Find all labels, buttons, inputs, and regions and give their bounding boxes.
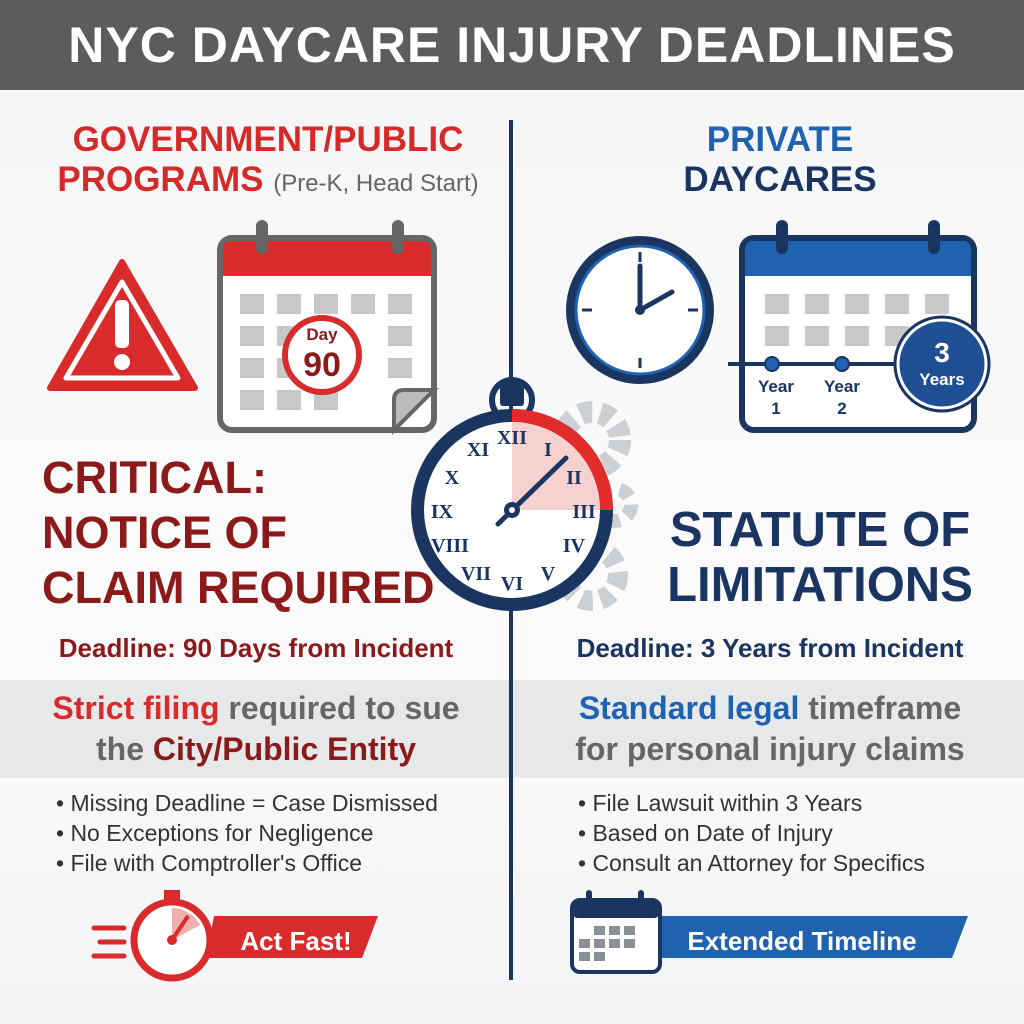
icon: stopwatch: II [566, 467, 582, 489]
gray bands [0, 680, 1024, 778]
icon: calendar day 90 [220, 220, 434, 430]
icon: stopwatch: IX [431, 501, 454, 523]
right bullets: • Based on Date of Injury [578, 820, 833, 846]
left heading [57, 120, 479, 199]
right band text: for personal injury claims [575, 731, 965, 767]
icon: calendar 3 years: Year [758, 377, 794, 396]
right bullets: • Consult an Attorney for Specifics [578, 850, 925, 876]
icon: calendar 3 years: 1 [771, 399, 781, 418]
right main heading: LIMITATIONS [667, 558, 973, 612]
left main heading: CLAIM REQUIRED [42, 562, 434, 613]
left bullets: • File with Comptroller's Office [56, 850, 362, 876]
icon: stopwatch: IV [563, 535, 586, 557]
left bullets [56, 790, 438, 876]
badge: extended timeline [572, 890, 968, 972]
right heading: DAYCARES [683, 160, 877, 199]
right band text [575, 690, 965, 767]
left deadline: Deadline: 90 Days from Incident [59, 633, 453, 663]
icon: stopwatch: VII [461, 563, 491, 585]
right deadline: Deadline: 3 Years from Incident [577, 633, 963, 663]
icon: warning [50, 262, 195, 388]
left main heading: NOTICE OF [42, 507, 287, 558]
left band text: Strict filing required to sue [52, 690, 460, 726]
right main heading: STATUTE OF [670, 503, 970, 557]
icon: stopwatch: XII [497, 427, 527, 449]
icon: stopwatch: I [544, 439, 552, 461]
header bar [0, 0, 1024, 90]
icon: calendar 3 years: Year [824, 377, 860, 396]
right band text: Standard legal timeframe [579, 690, 961, 726]
badge: extended timeline: Extended Timeline [687, 926, 917, 956]
icon: stopwatch: III [572, 501, 596, 523]
icon: calendar 3 years [728, 220, 989, 430]
left bullets: • Missing Deadline = Case Dismissed [56, 790, 438, 816]
badge: act fast: Act Fast! [240, 926, 352, 956]
icon: calendar 3 years: 2 [837, 399, 847, 418]
icon: stopwatch: VIII [431, 535, 469, 557]
icon: stopwatch: VI [501, 573, 523, 595]
title: NYC DAYCARE INJURY DEADLINES [68, 17, 956, 73]
left heading: GOVERNMENT/PUBLIC [73, 120, 463, 159]
icon: calendar day 90: 90 [303, 346, 341, 384]
right heading: PRIVATE [707, 120, 853, 159]
left main heading: CRITICAL: [42, 452, 267, 503]
left bullets: • No Exceptions for Negligence [56, 820, 373, 846]
right bullets: • File Lawsuit within 3 Years [578, 790, 862, 816]
left band text: the City/Public Entity [96, 731, 416, 767]
left band text [52, 690, 460, 767]
icon: calendar 3 years: Years [919, 370, 965, 389]
right main heading [667, 503, 973, 612]
icon: calendar 3 years: 3 [934, 337, 950, 368]
left heading: PROGRAMS (Pre-K, Head Start) [57, 160, 479, 199]
left main heading [42, 452, 434, 613]
icon: calendar day 90: Day [306, 325, 338, 344]
icon: stopwatch: XI [467, 439, 489, 461]
icon: stopwatch: V [541, 563, 556, 585]
icon: stopwatch: X [445, 467, 460, 489]
divider [509, 120, 513, 980]
badge: act fast [94, 890, 378, 978]
icon: wall clock [566, 236, 714, 384]
right heading [683, 120, 877, 199]
icon: stopwatch [411, 380, 631, 611]
right bullets [578, 790, 925, 876]
